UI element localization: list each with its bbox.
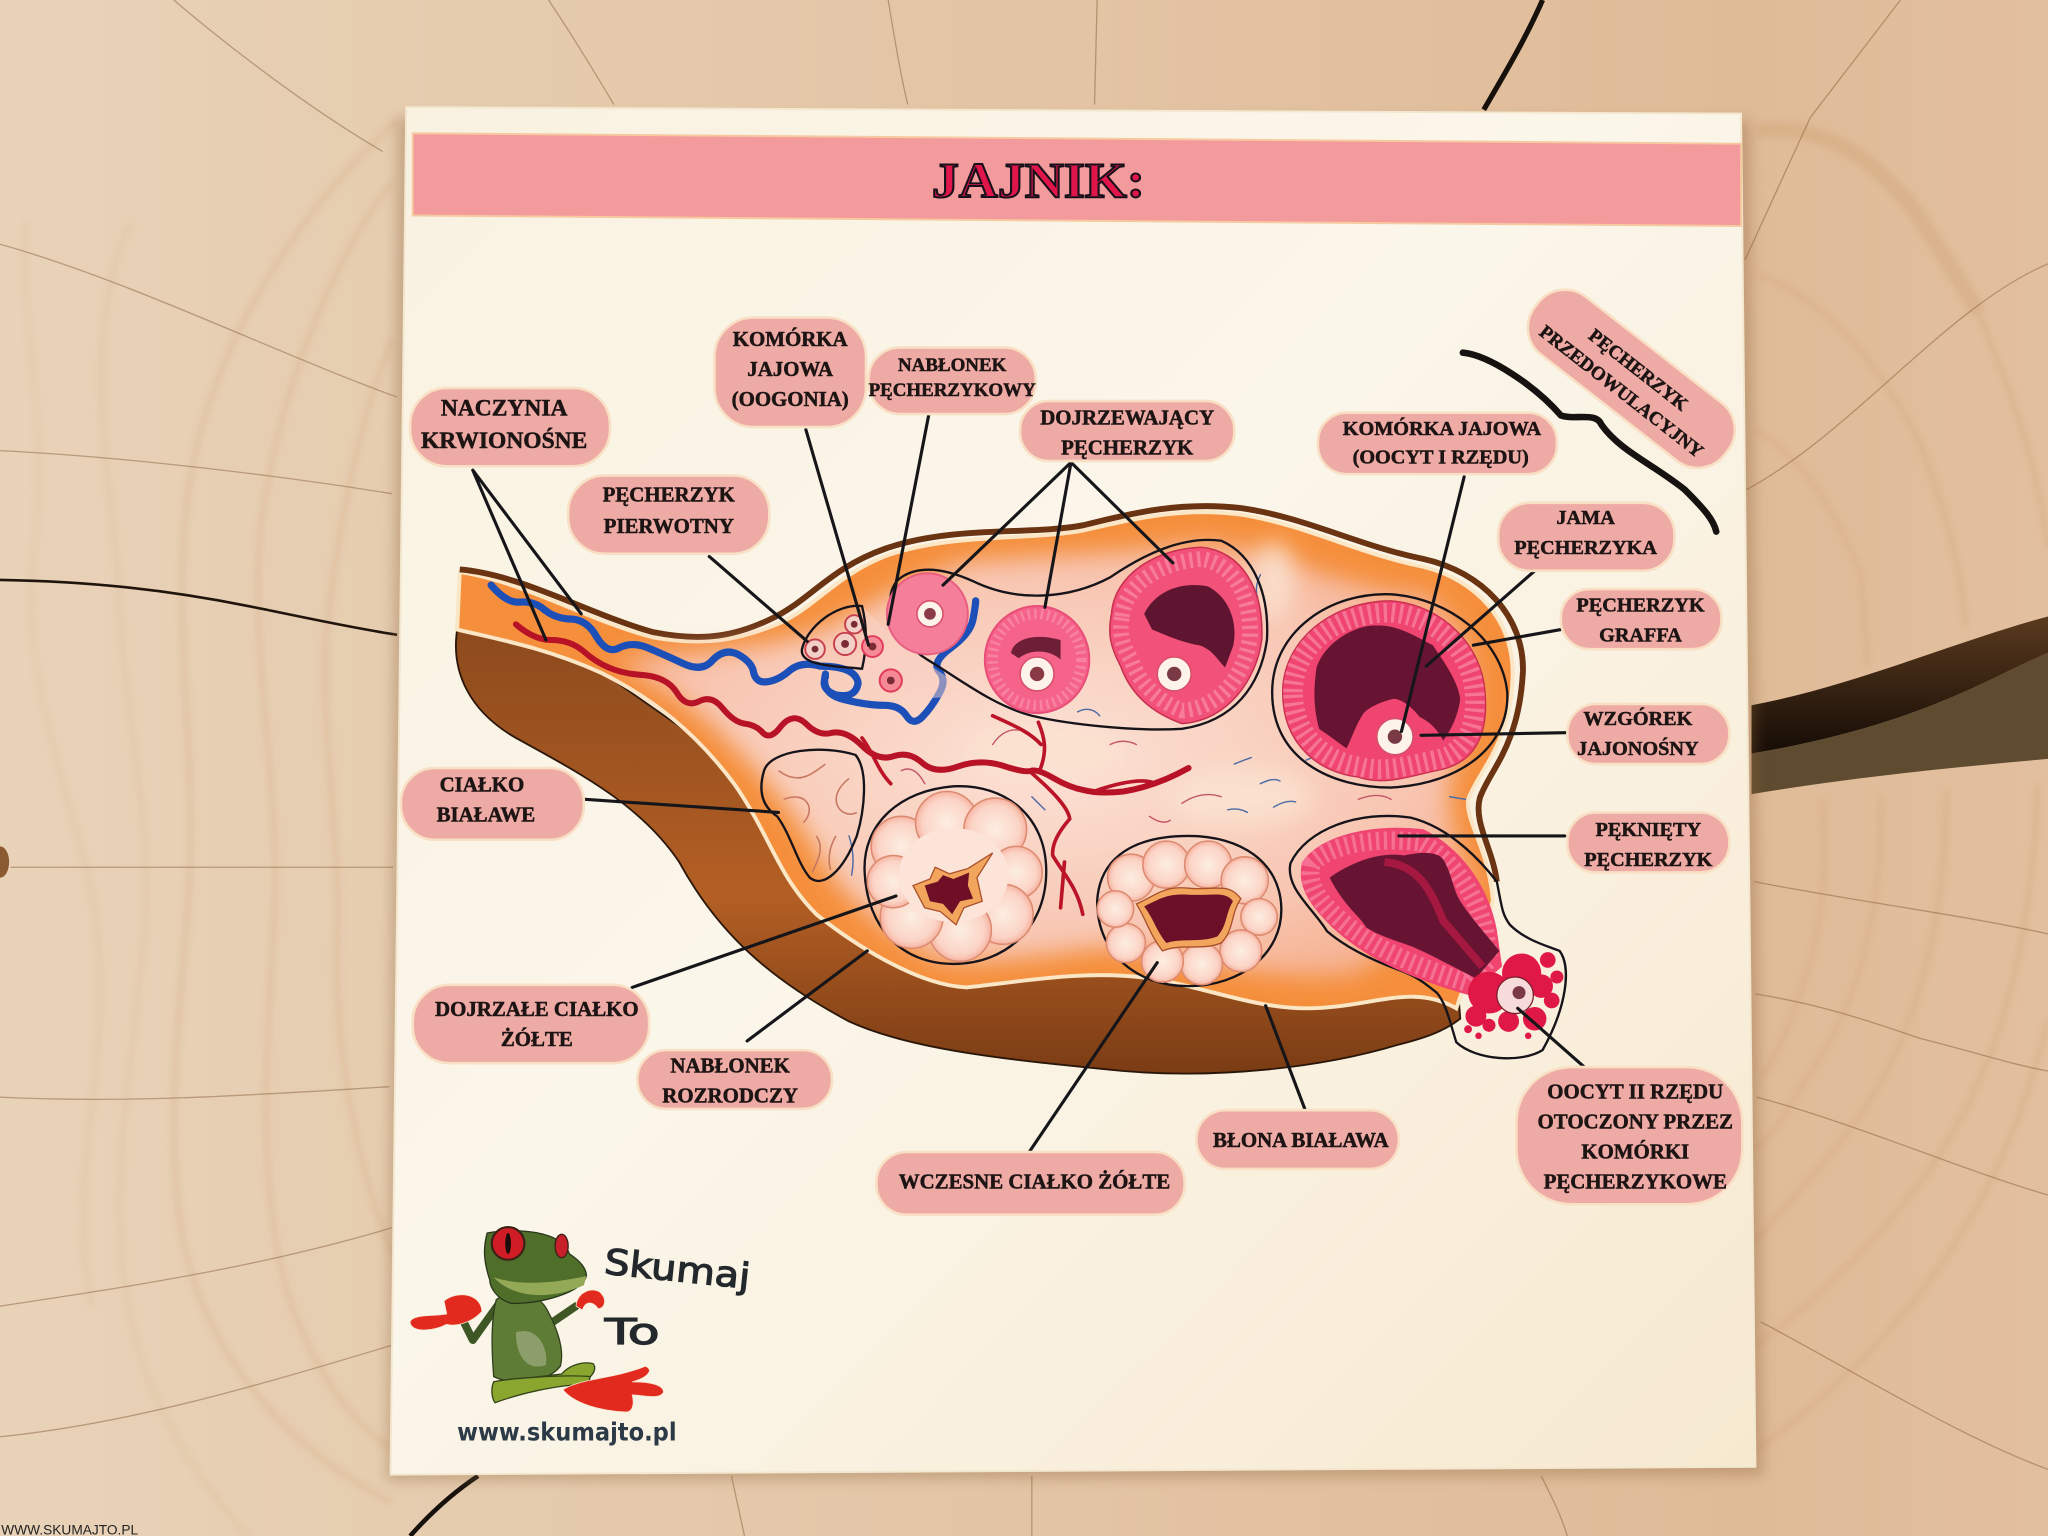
label: wczesne ciałko żółte: WCZESNE CIAŁKO ŻÓŁTE xyxy=(899,1170,1170,1194)
label: pęcherzyk pierwotny xyxy=(568,475,769,554)
frog eyes xyxy=(492,1227,524,1260)
label: dojrzewający pęcherzyk: DOJRZEWAJĄCY xyxy=(1040,405,1214,429)
label: nabłonek pęcherzykowy xyxy=(869,347,1036,414)
wood knot xyxy=(0,846,9,878)
label: jama pęcherzyka xyxy=(1498,503,1674,571)
small capillaries xyxy=(849,575,1465,875)
label: pęcherzyk przedowulacyjny: PRZEDOWULACYJNY xyxy=(1535,322,1707,463)
lines xyxy=(473,415,1584,1152)
frog hands and feet xyxy=(410,1290,664,1412)
title band xyxy=(413,133,1741,226)
label: ciałko białawe: BIAŁAWE xyxy=(437,803,535,827)
label: pęcherzyk przedowulacyjny xyxy=(1514,276,1749,482)
label: komórka jajowa oogonia xyxy=(714,317,866,427)
artery branches xyxy=(862,716,1156,914)
wood crack bottom xyxy=(410,1476,478,1536)
large antral follicle xyxy=(1110,547,1262,724)
label: błona biaława xyxy=(1196,1110,1399,1169)
label: wzgórek jajonośny: WZGÓREK xyxy=(1583,706,1693,730)
label: komórka jajowa oocyt I rzędu: KOMÓRKA JAJOWA xyxy=(1343,416,1542,440)
label: dojrzewający pęcherzyk: PĘCHERZYK xyxy=(1061,436,1194,460)
label: oocyt II rzędu: KOMÓRKI xyxy=(1581,1140,1689,1164)
label: nabłonek pęcherzykowy: PĘCHERZYKOWY xyxy=(869,380,1036,401)
vein blue xyxy=(491,585,976,721)
brace for preovulatory follicle xyxy=(1463,353,1716,532)
label: pęknięty pęcherzyk: PĘCHERZYK xyxy=(1584,849,1713,871)
label: komórka jajowa oogonia: KOMÓRKA xyxy=(733,327,848,351)
ovary diagram xyxy=(456,415,1584,1152)
burst cumulus xyxy=(1464,952,1563,1039)
label: komórka jajowa oocyt I rzędu xyxy=(1318,413,1557,474)
wood crack top xyxy=(1484,0,1543,110)
label: nabłonek pęcherzykowy: NABŁONEK xyxy=(898,355,1007,376)
label: nabłonek rozrodczy: ROZRODCZY xyxy=(662,1083,798,1107)
ruptured follicle xyxy=(1290,816,1566,1058)
label: pęknięty pęcherzyk: PĘKNIĘTY xyxy=(1595,819,1702,841)
mature corpus luteum xyxy=(865,786,1046,964)
label: dojrzewający pęcherzyk xyxy=(1020,401,1234,461)
plywood board xyxy=(387,107,1763,1481)
graafian follicle xyxy=(1272,594,1507,788)
corpus albicans xyxy=(761,750,864,881)
label: oocyt II rzędu: PĘCHERZYKOWE xyxy=(1544,1170,1727,1194)
primordial follicles region xyxy=(802,606,954,698)
label: naczynia krwionośne: NACZYNIA xyxy=(441,395,568,421)
label: pęcherzyk pierwotny: PĘCHERZYK xyxy=(603,483,736,507)
label: pęcherzyk przedowulacyjny: PĘCHERZYK xyxy=(1584,325,1692,416)
logo: skumaj: Skumaj xyxy=(602,1242,752,1298)
label: pęcherzyk pierwotny: PIERWOTNY xyxy=(604,514,734,538)
label: błona biaława: BŁONA BIAŁAWA xyxy=(1213,1128,1389,1152)
orange highlights xyxy=(967,542,1313,825)
wood crack right xyxy=(1752,616,2048,754)
label: naczynia krwionośne: KRWIONOŚNE xyxy=(421,427,587,454)
inner medulla xyxy=(614,542,1476,976)
logo: frog xyxy=(410,1227,664,1412)
label: pęcherzyk graffa xyxy=(1561,589,1721,649)
label: wczesne ciałko żółte xyxy=(876,1152,1185,1215)
frog arms xyxy=(460,1304,576,1340)
label: oocyt II rzędu: OOCYT II RZĘDU xyxy=(1547,1079,1723,1103)
label: nabłonek rozrodczy: NABŁONEK xyxy=(670,1053,791,1077)
logo: to: To xyxy=(603,1312,660,1353)
label: jama pęcherzyka: PĘCHERZYKA xyxy=(1514,537,1657,559)
label: dojrzałe ciałko żółte: ŻÓŁTE xyxy=(501,1027,573,1051)
artery red xyxy=(516,624,1189,793)
label: oocyt II rzędu: OTOCZONY PRZEZ xyxy=(1538,1109,1733,1133)
label: komórka jajowa oogonia: JAJOWA xyxy=(747,357,833,381)
label: pęcherzyk graffa: GRAFFA xyxy=(1599,624,1682,646)
top capsule line xyxy=(460,506,1523,882)
wood crack left xyxy=(0,580,397,635)
label: naczynia krwionośne xyxy=(410,388,610,466)
label: pęcherzyk graffa: PĘCHERZYK xyxy=(1576,594,1705,616)
label: komórka jajowa oocyt I rzędu: (OOCYT I RZĘDU) xyxy=(1353,447,1529,469)
primary follicle xyxy=(887,573,968,654)
label: wzgórek jajonośny: JAJONOŚNY xyxy=(1577,736,1699,760)
label: jama pęcherzyka: JAMA xyxy=(1556,507,1615,529)
label: dojrzałe ciałko żółte xyxy=(413,985,649,1063)
label: pęknięty pęcherzyk xyxy=(1567,812,1729,872)
maturing follicle outline xyxy=(890,540,1267,729)
label: dojrzałe ciałko żółte: DOJRZAŁE CIAŁKO xyxy=(435,997,639,1021)
label: oocyt II rzędu xyxy=(1516,1067,1742,1204)
orange body xyxy=(457,512,1513,1008)
label: ciałko białawe xyxy=(401,768,584,840)
label: ciałko białawe: CIAŁKO xyxy=(440,773,524,797)
early corpus luteum xyxy=(1097,836,1281,986)
label: wzgórek jajonośny xyxy=(1567,704,1729,764)
title: JAJNIK: xyxy=(932,153,1145,208)
label: nabłonek rozrodczy xyxy=(637,1050,832,1109)
secondary follicle xyxy=(985,606,1089,713)
outer cortex brown xyxy=(456,630,1460,1074)
logo: website: www.skumajto.pl xyxy=(457,1418,677,1447)
label: komórka jajowa oogonia: (OOGONIA) xyxy=(732,387,849,411)
